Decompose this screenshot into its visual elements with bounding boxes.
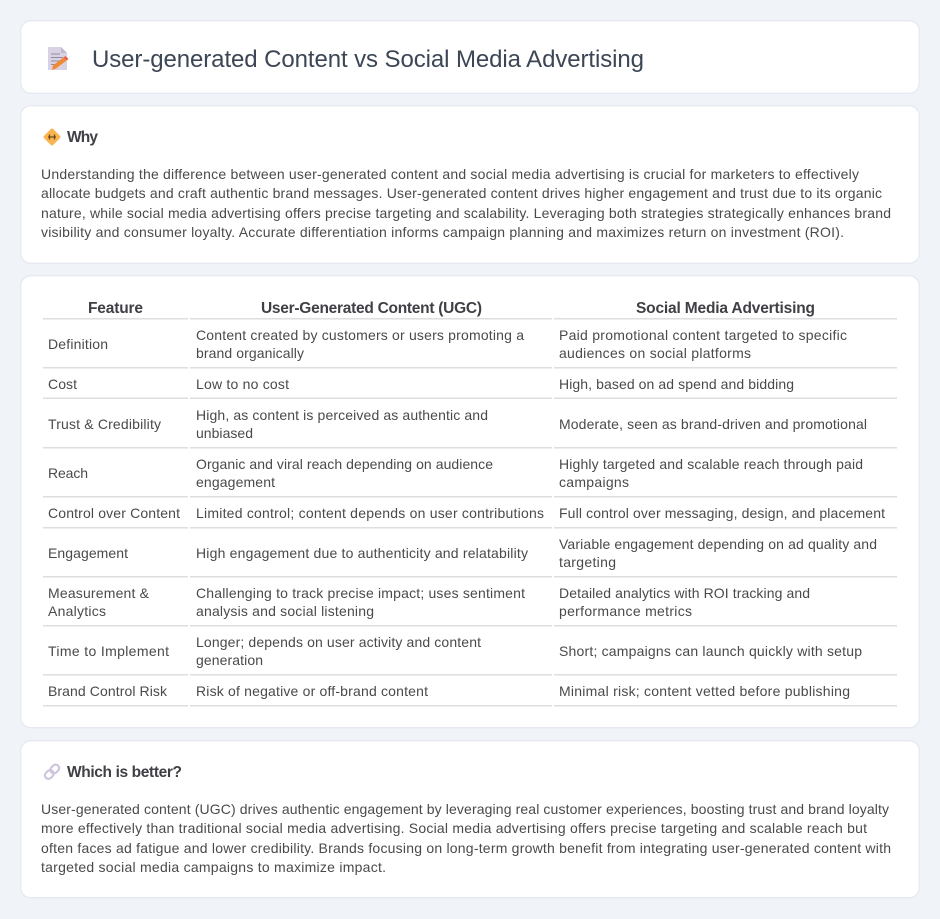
icon: document with pencil: [48, 47, 68, 70]
row: measurement and analytics: [43, 585, 897, 626]
row: control over content: [43, 505, 897, 528]
row: definition: [43, 327, 897, 368]
row: definition: audiences on social platforms: [559, 345, 751, 361]
row: brand control risk: Minimal risk; content vetted before publishing: [559, 683, 850, 699]
panel: why: [21, 106, 919, 263]
table header: Feature: [88, 300, 143, 317]
row: brand control risk: Brand Control Risk: [48, 683, 168, 699]
text block: which is better paragraph: often faces ad fatigue and lower credibility. Brands focusing on long-term growth benefit from integrating user-generated content with: [41, 840, 891, 856]
row: time to implement: Time to Implement: [48, 643, 169, 659]
row: trust and credibility: [43, 407, 897, 448]
heading: which is better: Which is better?: [67, 764, 182, 781]
text block: why paragraph: nature, while social media advertising offers precise targeting and scalability. Leveraging both strategies strategically enhances brand: [41, 205, 891, 221]
row: measurement and analytics: Analytics: [48, 603, 106, 619]
table header: User-Generated Content (UGC): [261, 300, 482, 317]
title: User-generated Content vs Social Media Advertising: [92, 46, 644, 73]
row: measurement and analytics: Measurement &: [48, 585, 150, 601]
row: measurement and analytics: Challenging to track precise impact; uses sentiment: [196, 585, 525, 601]
row: definition: Definition: [48, 336, 108, 352]
row: control over content: Limited control; content depends on user contributions: [196, 505, 544, 521]
row: definition: Content created by customers or users promoting a: [196, 327, 524, 343]
text block: why paragraph: allocate budgets and craft authentic brand messages. User-generated content drives higher engagement and trust due to its organic: [41, 185, 882, 201]
row: reach: Reach: [48, 465, 88, 481]
row: engagement: targeting: [559, 554, 616, 570]
panel: title card: [21, 21, 919, 93]
row: measurement and analytics: analysis and social listening: [196, 603, 374, 619]
row: trust and credibility: unbiased: [196, 425, 253, 441]
row: cost: [43, 376, 897, 399]
row: engagement: High engagement due to authenticity and relatability: [196, 545, 528, 561]
text block: why paragraph: Understanding the difference between user-generated content and social media advertising is crucial for marketers to effectively: [41, 166, 859, 182]
text block: which is better paragraph: targeted social media campaigns to maximize impact.: [41, 859, 386, 875]
row: engagement: Variable engagement depending on ad quality and: [559, 536, 877, 552]
text block: which is better paragraph: more effectively than traditional social media advertising. Social media advertising offers precise targeting and scalable reach but: [41, 820, 867, 836]
text block: which is better paragraph: User-generated content (UGC) drives authentic engagement by leveraging real customer experiences, boosting trust and brand loyalty: [41, 801, 889, 817]
row: control over content: Full control over messaging, design, and placement: [559, 505, 885, 521]
row: control over content: Control over Content: [48, 505, 180, 521]
row: time to implement: Short; campaigns can launch quickly with setup: [559, 643, 862, 659]
row: reach: [43, 456, 897, 498]
row: time to implement: Longer; depends on user activity and content: [196, 634, 481, 650]
row: cost: Cost: [48, 376, 77, 392]
row: cost: Low to no cost: [196, 376, 289, 392]
row: time to implement: [43, 634, 897, 676]
text block: why paragraph: [41, 166, 891, 240]
row: reach: Organic and viral reach depending on audience: [196, 456, 493, 472]
row: reach: Highly targeted and scalable reach through paid: [559, 456, 863, 472]
row: cost: High, based on ad spend and bidding: [559, 376, 794, 392]
table header: Social Media Advertising: [636, 300, 815, 317]
row: engagement: Engagement: [48, 545, 128, 561]
text block: which is better paragraph: [41, 801, 891, 875]
row: engagement: [43, 536, 897, 578]
text block: why paragraph: visibility and consumer loyalty. Accurate differentiation informs campaign planning and maximizes return on investment (ROI).: [41, 224, 844, 240]
icon: chain link: [43, 763, 61, 780]
heading: why: Why: [67, 129, 98, 146]
row: reach: campaigns: [559, 474, 629, 490]
row: trust and credibility: High, as content is perceived as authentic and: [196, 407, 488, 423]
row: reach: engagement: [196, 474, 275, 490]
row: time to implement: generation: [196, 652, 263, 668]
panel: which is better: [21, 741, 919, 898]
row: brand control risk: [43, 683, 897, 706]
row: definition: brand organically: [196, 345, 304, 361]
row: brand control risk: Risk of negative or off-brand content: [196, 683, 428, 699]
row: measurement and analytics: Detailed analytics with ROI tracking and: [559, 585, 810, 601]
row: measurement and analytics: performance metrics: [559, 603, 692, 619]
row: trust and credibility: Trust & Credibility: [48, 416, 161, 432]
icon: amber diamond sign: [43, 128, 61, 146]
panel: comparison table: [21, 276, 919, 728]
table header: [43, 300, 897, 320]
row: trust and credibility: Moderate, seen as brand-driven and promotional: [559, 416, 867, 432]
row: definition: Paid promotional content targeted to specific: [559, 327, 847, 343]
